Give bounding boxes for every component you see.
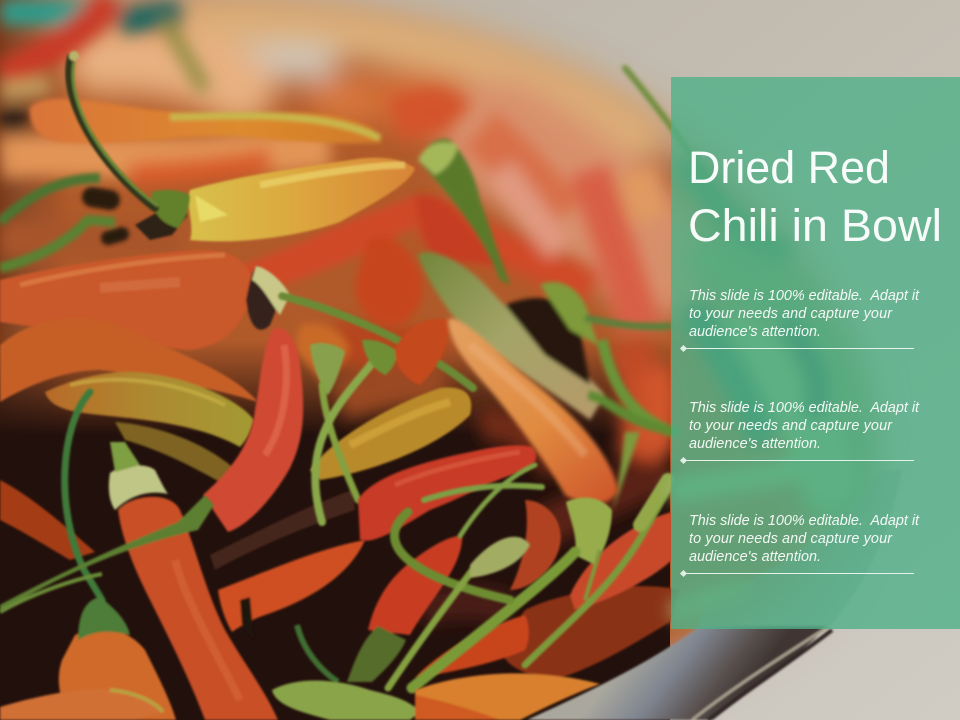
dark depth between lower chilies [0,340,670,720]
text block 3: to your needs and capture your [689,531,893,547]
bottom left orange chili with green cap [0,597,176,720]
title [688,142,942,251]
text block 1: to your needs and capture your [689,306,893,322]
bowl rim [527,470,902,720]
blurred green stems behind panel [680,170,830,610]
left dark-backed stems [0,178,122,268]
text block 2: to your needs and capture your [689,418,893,434]
divider with diamond 2 [680,457,914,464]
lower left chilies [0,318,471,560]
blurred top-left fragments [0,0,330,175]
text block 1 [689,288,920,340]
far blurred top chilies and bowl edge [100,20,841,490]
red center chilies [347,445,561,682]
text block 3: audience's attention. [689,549,821,565]
panel: green translucent text panel [671,77,960,629]
text block 2: This slide is 100% editable. Adapt it [689,400,920,416]
divider with diamond 3 [680,570,914,577]
green stem crossing panel top [625,68,730,215]
blurred salmon mid-right chilies [395,111,660,450]
title: Chili in Bowl [688,200,942,251]
yellow chili with curved stem [69,51,415,241]
tall orange chili with pale cap [0,442,278,720]
green stem in the dark [65,392,102,600]
divider with diamond 1 [680,345,914,352]
text block 1: audience's attention. [689,324,821,340]
mid-depth warm fill between chilies [0,240,668,610]
text block 2: audience's attention. [689,436,821,452]
orange tapered chili with cap and long stem [448,319,618,504]
center stems [310,319,448,522]
title: Dried Red [688,142,890,193]
large red-orange chili [0,250,473,388]
text block 3 [689,513,920,565]
chilies behind, mid-focus [235,195,500,385]
red vertical chili [203,328,303,532]
text block 3: This slide is 100% editable. Adapt it [689,513,920,529]
text block 1: This slide is 100% editable. Adapt it [689,288,920,304]
stems over center bottom [388,465,668,688]
top orange chili [30,99,382,143]
text block 2 [689,400,920,452]
lower right red chilies [415,512,680,678]
right olive chili and stems [418,139,680,512]
brown stick and orange carrot chili [210,490,365,682]
bottom center chilies [272,673,600,720]
